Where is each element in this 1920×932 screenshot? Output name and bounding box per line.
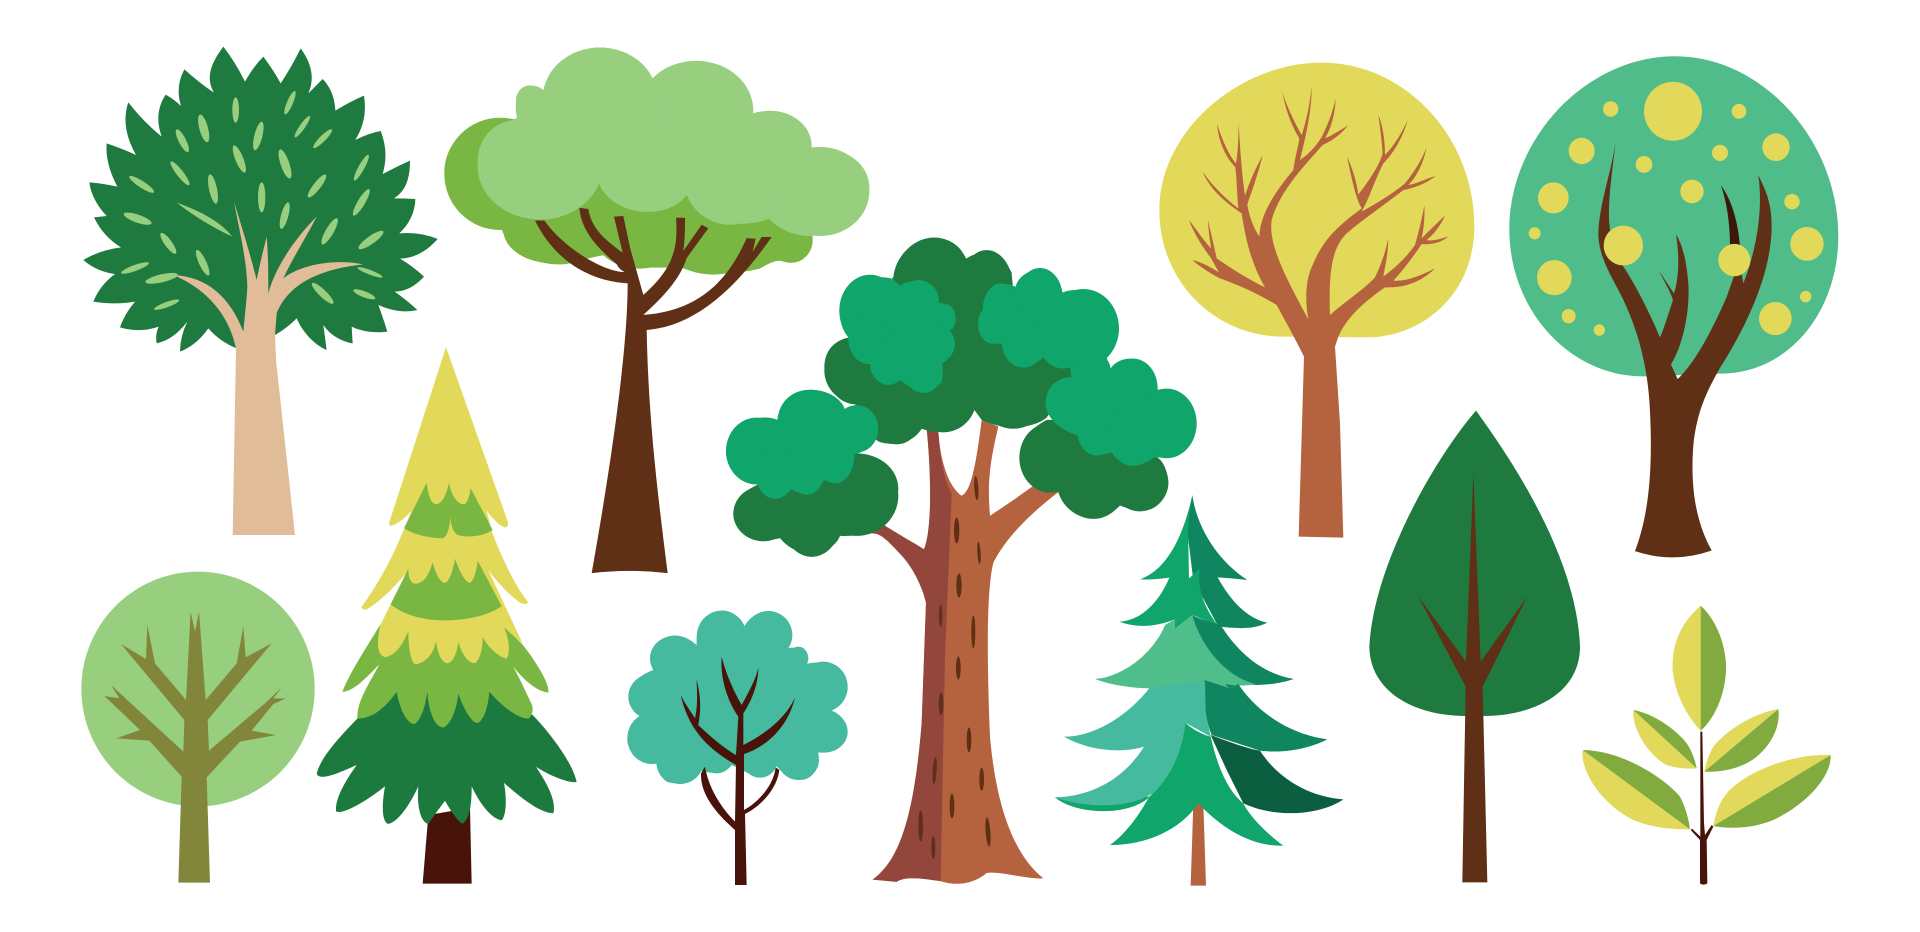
tree: round light green canopy with olive branches: [81, 572, 315, 883]
right big leaf: [1713, 755, 1831, 828]
left big leaf: [1582, 750, 1690, 829]
middle tier shaded side: [1192, 615, 1294, 688]
tree: large central tree with bark marks: [726, 238, 1197, 884]
right small leaf: [1704, 709, 1779, 772]
trunk: [423, 808, 472, 884]
bark marks: [918, 476, 991, 859]
top dark foliage: [824, 238, 1073, 444]
tree: teal and green fir: [1055, 495, 1343, 886]
foliage: [627, 611, 848, 784]
bottom tier darkest side: [1211, 735, 1343, 813]
upper right light foliage: [978, 268, 1119, 368]
foliage: [83, 47, 438, 352]
lower tier shaded side: [1204, 680, 1327, 752]
top tier shaded side: [1187, 495, 1267, 628]
right lower dark foliage: [1019, 420, 1168, 519]
small light leaves: [120, 90, 386, 312]
lower dark tier: [317, 692, 577, 824]
tree: small teal bush tree: [627, 611, 848, 885]
canopy: [1509, 56, 1838, 376]
trunk and branches: [535, 208, 772, 573]
top leaf: [1673, 606, 1726, 731]
stem: [1691, 732, 1713, 885]
dark twig: [1721, 185, 1740, 246]
trunk and branches: [1598, 140, 1772, 557]
green band two: [391, 559, 502, 620]
trunk and branches: [1189, 86, 1448, 538]
front canopy: [478, 48, 869, 236]
trunk and branches: [681, 657, 795, 885]
lower tier under edge: [1055, 797, 1150, 811]
middle tier light side: [1095, 615, 1257, 693]
trunk and branches: [1418, 473, 1527, 882]
trunk light side: [872, 420, 1058, 884]
upper yellow tiers: [361, 347, 528, 664]
lower tier teal side: [1055, 682, 1211, 805]
tree: round yellow canopy with bare branches: [1159, 63, 1474, 538]
canopy: [81, 572, 315, 806]
canopy: [1369, 411, 1580, 716]
trunk shaded side: [872, 429, 952, 882]
tree: green canopy with yellow spots: [1509, 56, 1838, 557]
tree: leafy dark green tree with beige trunk: [83, 47, 438, 535]
upper left light foliage: [839, 275, 956, 393]
top tier lit side: [1119, 495, 1218, 629]
green band one: [404, 483, 493, 538]
left upper light foliage: [726, 390, 878, 499]
middle green tier: [342, 625, 548, 727]
back canopy: [444, 118, 813, 275]
bottom tier front: [1110, 723, 1283, 846]
canopy: [1159, 63, 1474, 337]
yellow spots: [1529, 82, 1824, 336]
right lower light foliage: [1046, 355, 1197, 466]
tree: light green cloud canopy with brown trunk: [444, 48, 869, 573]
trunk and branches: [104, 612, 286, 883]
left small leaf: [1633, 710, 1697, 769]
left lower dark foliage: [733, 453, 898, 557]
plant: five leaf sapling: [1582, 606, 1831, 885]
trunk and branches: [173, 202, 363, 535]
tree: teardrop dark green canopy: [1369, 411, 1580, 882]
trunk: [1191, 803, 1206, 886]
tree: layered yellow and green pine: [317, 347, 577, 884]
